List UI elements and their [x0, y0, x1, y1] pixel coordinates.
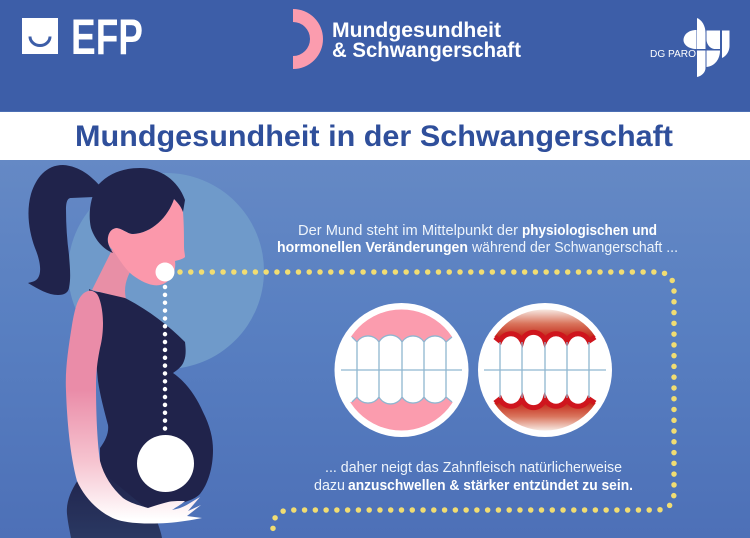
- icon: smile square: [22, 18, 58, 54]
- conclusion text: [314, 459, 633, 494]
- intro text: [277, 222, 678, 256]
- EFP wordmark: EFP: [71, 9, 143, 65]
- lower body: [67, 470, 162, 538]
- arm: [66, 291, 202, 524]
- pregnant woman illustration: [28, 165, 213, 538]
- icon: pink half ring: [293, 9, 323, 69]
- title band: [0, 112, 750, 160]
- neck: [92, 248, 130, 299]
- inflamed gum line: [495, 332, 595, 408]
- hair: [90, 168, 185, 253]
- intro text: während der Schwangerschaft ...: [471, 239, 678, 256]
- ponytail: [28, 165, 100, 295]
- icon: dg mark: [684, 18, 730, 77]
- conclusion text: dazu: [314, 477, 345, 494]
- pink gums: [341, 310, 462, 430]
- DG PARO label: DG PARO: [650, 48, 696, 60]
- EFP logo: [22, 9, 143, 65]
- teeth: [341, 336, 462, 404]
- dress and belly: [89, 289, 213, 510]
- conclusion text: ... daher neigt das Zahnfleisch natürlicherweise: [325, 459, 622, 476]
- campaign logo: [293, 9, 521, 69]
- intro text: hormonellen Veränderungen: [277, 239, 468, 256]
- header band: [0, 0, 750, 112]
- white dotted line: [163, 287, 167, 430]
- light circle behind head: [68, 173, 264, 369]
- mouth marker: [156, 262, 174, 282]
- red gums: [484, 310, 606, 430]
- face: [108, 199, 185, 285]
- body background: [0, 160, 750, 538]
- DG PARO logo: [650, 18, 730, 77]
- campaign name: [332, 19, 521, 62]
- campaign name: & Schwangerschaft: [332, 39, 521, 62]
- tooth outlines: [484, 342, 606, 398]
- intro text: physiologischen und: [522, 222, 657, 239]
- title: Mundgesundheit in der Schwangerschaft: [75, 120, 673, 153]
- conclusion text: anzuschwellen & stärker entzündet zu sein.: [348, 477, 633, 494]
- intro text: Der Mund steht im Mittelpunkt der: [298, 222, 518, 239]
- healthy gums circle: [330, 303, 475, 437]
- inflamed gums circle: [475, 303, 615, 437]
- yellow dotted path: [180, 272, 674, 538]
- campaign name: Mundgesundheit: [332, 19, 501, 42]
- baby circle: [137, 435, 194, 492]
- teeth: [484, 334, 606, 406]
- tooth outlines: [341, 335, 462, 404]
